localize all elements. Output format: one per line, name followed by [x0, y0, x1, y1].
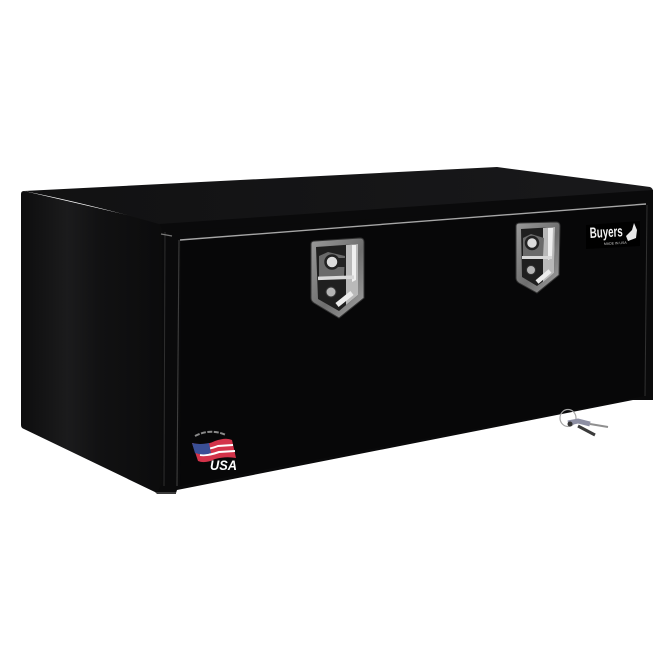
right door latch	[516, 222, 560, 293]
foot	[155, 492, 176, 494]
door top highlight	[180, 204, 646, 240]
top panel	[24, 167, 653, 226]
front lip	[160, 190, 653, 238]
brand logo: Buyers	[586, 221, 640, 249]
USA flag badge	[192, 432, 237, 473]
door left edge highlight	[177, 240, 179, 486]
left side panel	[21, 191, 166, 493]
toolbox body	[21, 167, 653, 494]
brand logo: Buyers: MADE IN USA	[604, 241, 627, 246]
keys	[560, 410, 608, 435]
frame left edge highlight	[164, 232, 165, 486]
left door latch	[311, 238, 364, 318]
brand logo: Buyers: Buyers	[589, 223, 623, 242]
USA text: USA	[210, 457, 237, 473]
door panel	[180, 205, 647, 486]
front frame	[157, 202, 653, 493]
right edge highlight	[645, 205, 647, 396]
